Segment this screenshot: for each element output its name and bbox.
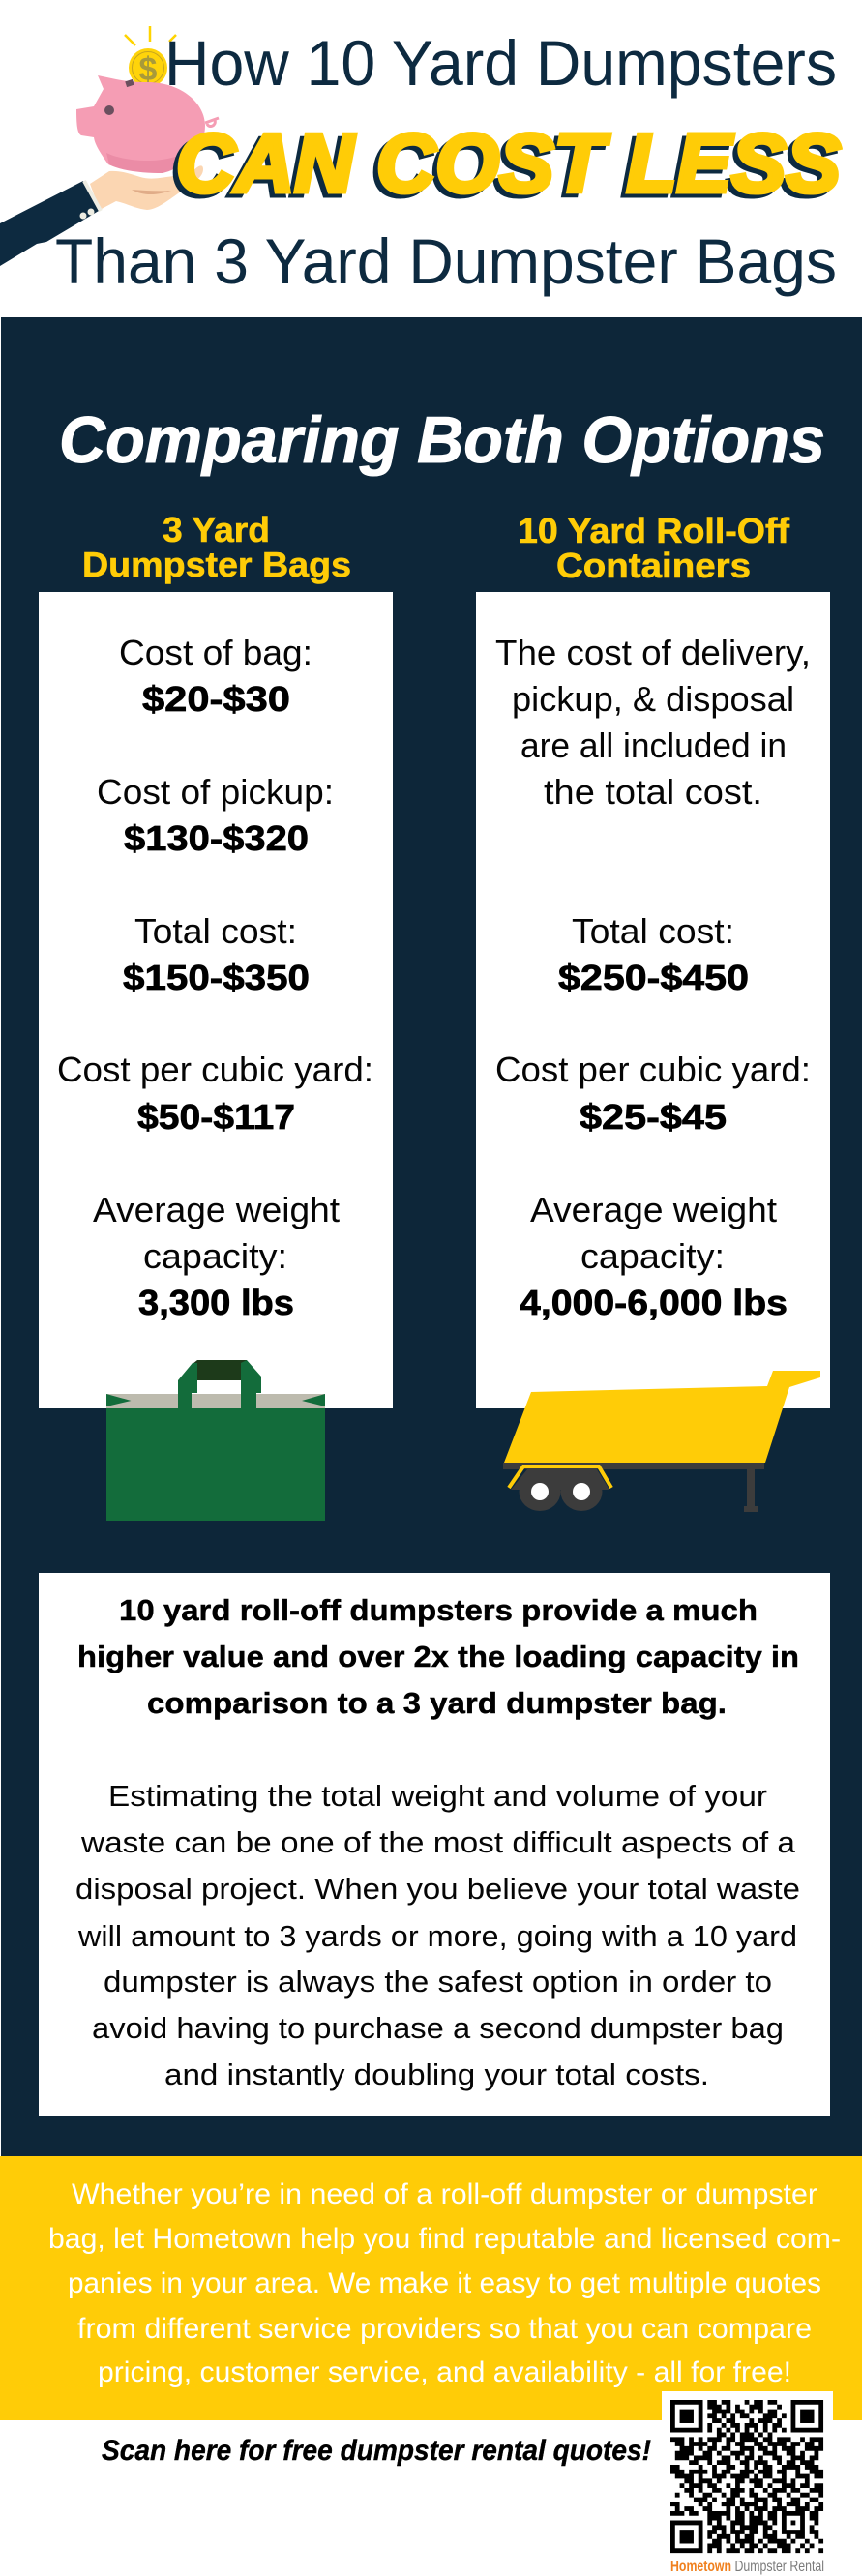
cost per cubic yard (495, 1050, 811, 1137)
total cost: Total cost: (572, 911, 734, 951)
title (55, 27, 841, 297)
icon: yellow roll-off dumpster trailer (503, 1371, 820, 1512)
included costs note (495, 633, 811, 812)
panel: value explanation (39, 1573, 830, 2116)
title highlight with offset shadow: CAN COST LESS (171, 122, 836, 214)
included costs note: the total cost. (544, 772, 762, 812)
bold summary: 10 yard roll-off dumpsters provide a much (119, 1593, 758, 1627)
body paragraph: disposal project. When you believe your total waste (75, 1872, 800, 1906)
icon: piggy bank (76, 75, 219, 173)
cost per cubic yard: Cost per cubic yard: (495, 1050, 811, 1089)
icon: green dumpster bag (106, 1360, 325, 1521)
average weight capacity: capacity: (143, 1236, 287, 1276)
average weight capacity (93, 1190, 340, 1322)
average weight capacity: Average weight (93, 1190, 340, 1229)
total cost: Total cost: (134, 911, 297, 951)
illustration: hand holding piggy bank with coin (0, 26, 219, 266)
body paragraph: waste can be one of the most difficult aspects of a (80, 1825, 796, 1859)
panel: yellow call to action: from different service providers so that you can compare (77, 2313, 812, 2345)
bold summary: comparison to a 3 yard dumpster bag. (147, 1686, 727, 1720)
panel: yellow call to action: panies in your area. We make it easy to get multiple quotes (68, 2267, 821, 2299)
included costs note: are all included in (520, 725, 787, 765)
icon: idea rays above coin (125, 26, 176, 45)
column heading: 10 yard roll-off containers: Containers (556, 546, 751, 585)
cost of bag: Cost of bag: (119, 633, 312, 672)
title highlight with offset shadow: CAN COST LESS (176, 118, 841, 210)
cost of bag: $20-$30 (142, 679, 290, 719)
body paragraph: and instantly doubling your total costs. (164, 2058, 709, 2091)
icon: open hand (90, 165, 203, 210)
column heading: 3 yard dumpster bags (82, 510, 351, 584)
cost per cubic yard (57, 1050, 373, 1137)
total cost (558, 911, 749, 997)
cost per cubic yard: $25-$45 (580, 1097, 727, 1137)
cost per cubic yard: $50-$117 (137, 1097, 295, 1137)
panel: yellow call to action: Whether you’re in need of a roll-off dumpster or dumpster (72, 2178, 817, 2210)
total cost: $250-$450 (558, 958, 749, 997)
cost of bag (119, 633, 312, 719)
column heading: 3 yard dumpster bags: 3 Yard (163, 510, 270, 549)
icon: suit sleeve with cuff (0, 181, 101, 266)
panel: navy comparison background (1, 317, 862, 2156)
included costs note: pickup, & disposal (512, 679, 794, 719)
panel: yellow call to action: pricing, customer service, and availability - all for free! (98, 2356, 791, 2388)
total cost: $150-$350 (123, 958, 310, 997)
body paragraph: will amount to 3 yards or more, going with a 10 yard (77, 1919, 797, 1953)
brand label: Hometown Dumpster Rental (670, 2559, 824, 2575)
panel: 3 yard bags card (39, 592, 393, 1408)
text: scan prompt: Scan here for free dumpster rental quotes! (102, 2435, 651, 2467)
bold summary: higher value and over 2x the loading capacity in (77, 1640, 799, 1673)
title line 1: How 10 Yard Dumpsters (164, 27, 837, 99)
cost of pickup (97, 772, 334, 858)
column heading: 3 yard dumpster bags: Dumpster Bags (82, 545, 351, 584)
average weight capacity (520, 1190, 788, 1322)
panel: yellow call to action: bag, let Hometown help you find reputable and licensed com- (48, 2223, 841, 2255)
included costs note: The cost of delivery, (495, 633, 811, 672)
cost of pickup: $130-$320 (124, 818, 309, 858)
cost of pickup: Cost of pickup: (97, 772, 334, 812)
column heading: 10 yard roll-off containers: 10 Yard Roll-Off (518, 511, 790, 550)
QR code block with backing (662, 2391, 833, 2576)
panel: yellow call to action (0, 2156, 862, 2420)
total cost (123, 911, 310, 997)
icon: gold dollar coin (129, 48, 167, 88)
QR code (670, 2400, 823, 2553)
average weight capacity: 3,300 lbs (138, 1283, 294, 1322)
body paragraph: dumpster is always the safest option in order to (104, 1965, 772, 1999)
body paragraph (75, 1779, 800, 2091)
bold summary (77, 1593, 799, 1720)
title line 3: Than 3 Yard Dumpster Bags (55, 225, 837, 297)
icon: gold dollar coin: $ (139, 51, 158, 88)
heading: comparing both options: Comparing Both Options (59, 403, 825, 477)
panel: 10 yard containers card (476, 592, 830, 1408)
average weight capacity: 4,000-6,000 lbs (520, 1283, 788, 1322)
average weight capacity: Average weight (530, 1190, 777, 1229)
cost per cubic yard: Cost per cubic yard: (57, 1050, 373, 1089)
body paragraph: Estimating the total weight and volume of your (108, 1779, 767, 1813)
average weight capacity: capacity: (580, 1236, 725, 1276)
column heading: 10 yard roll-off containers (518, 511, 790, 585)
body paragraph: avoid having to purchase a second dumpster bag (92, 2011, 784, 2045)
